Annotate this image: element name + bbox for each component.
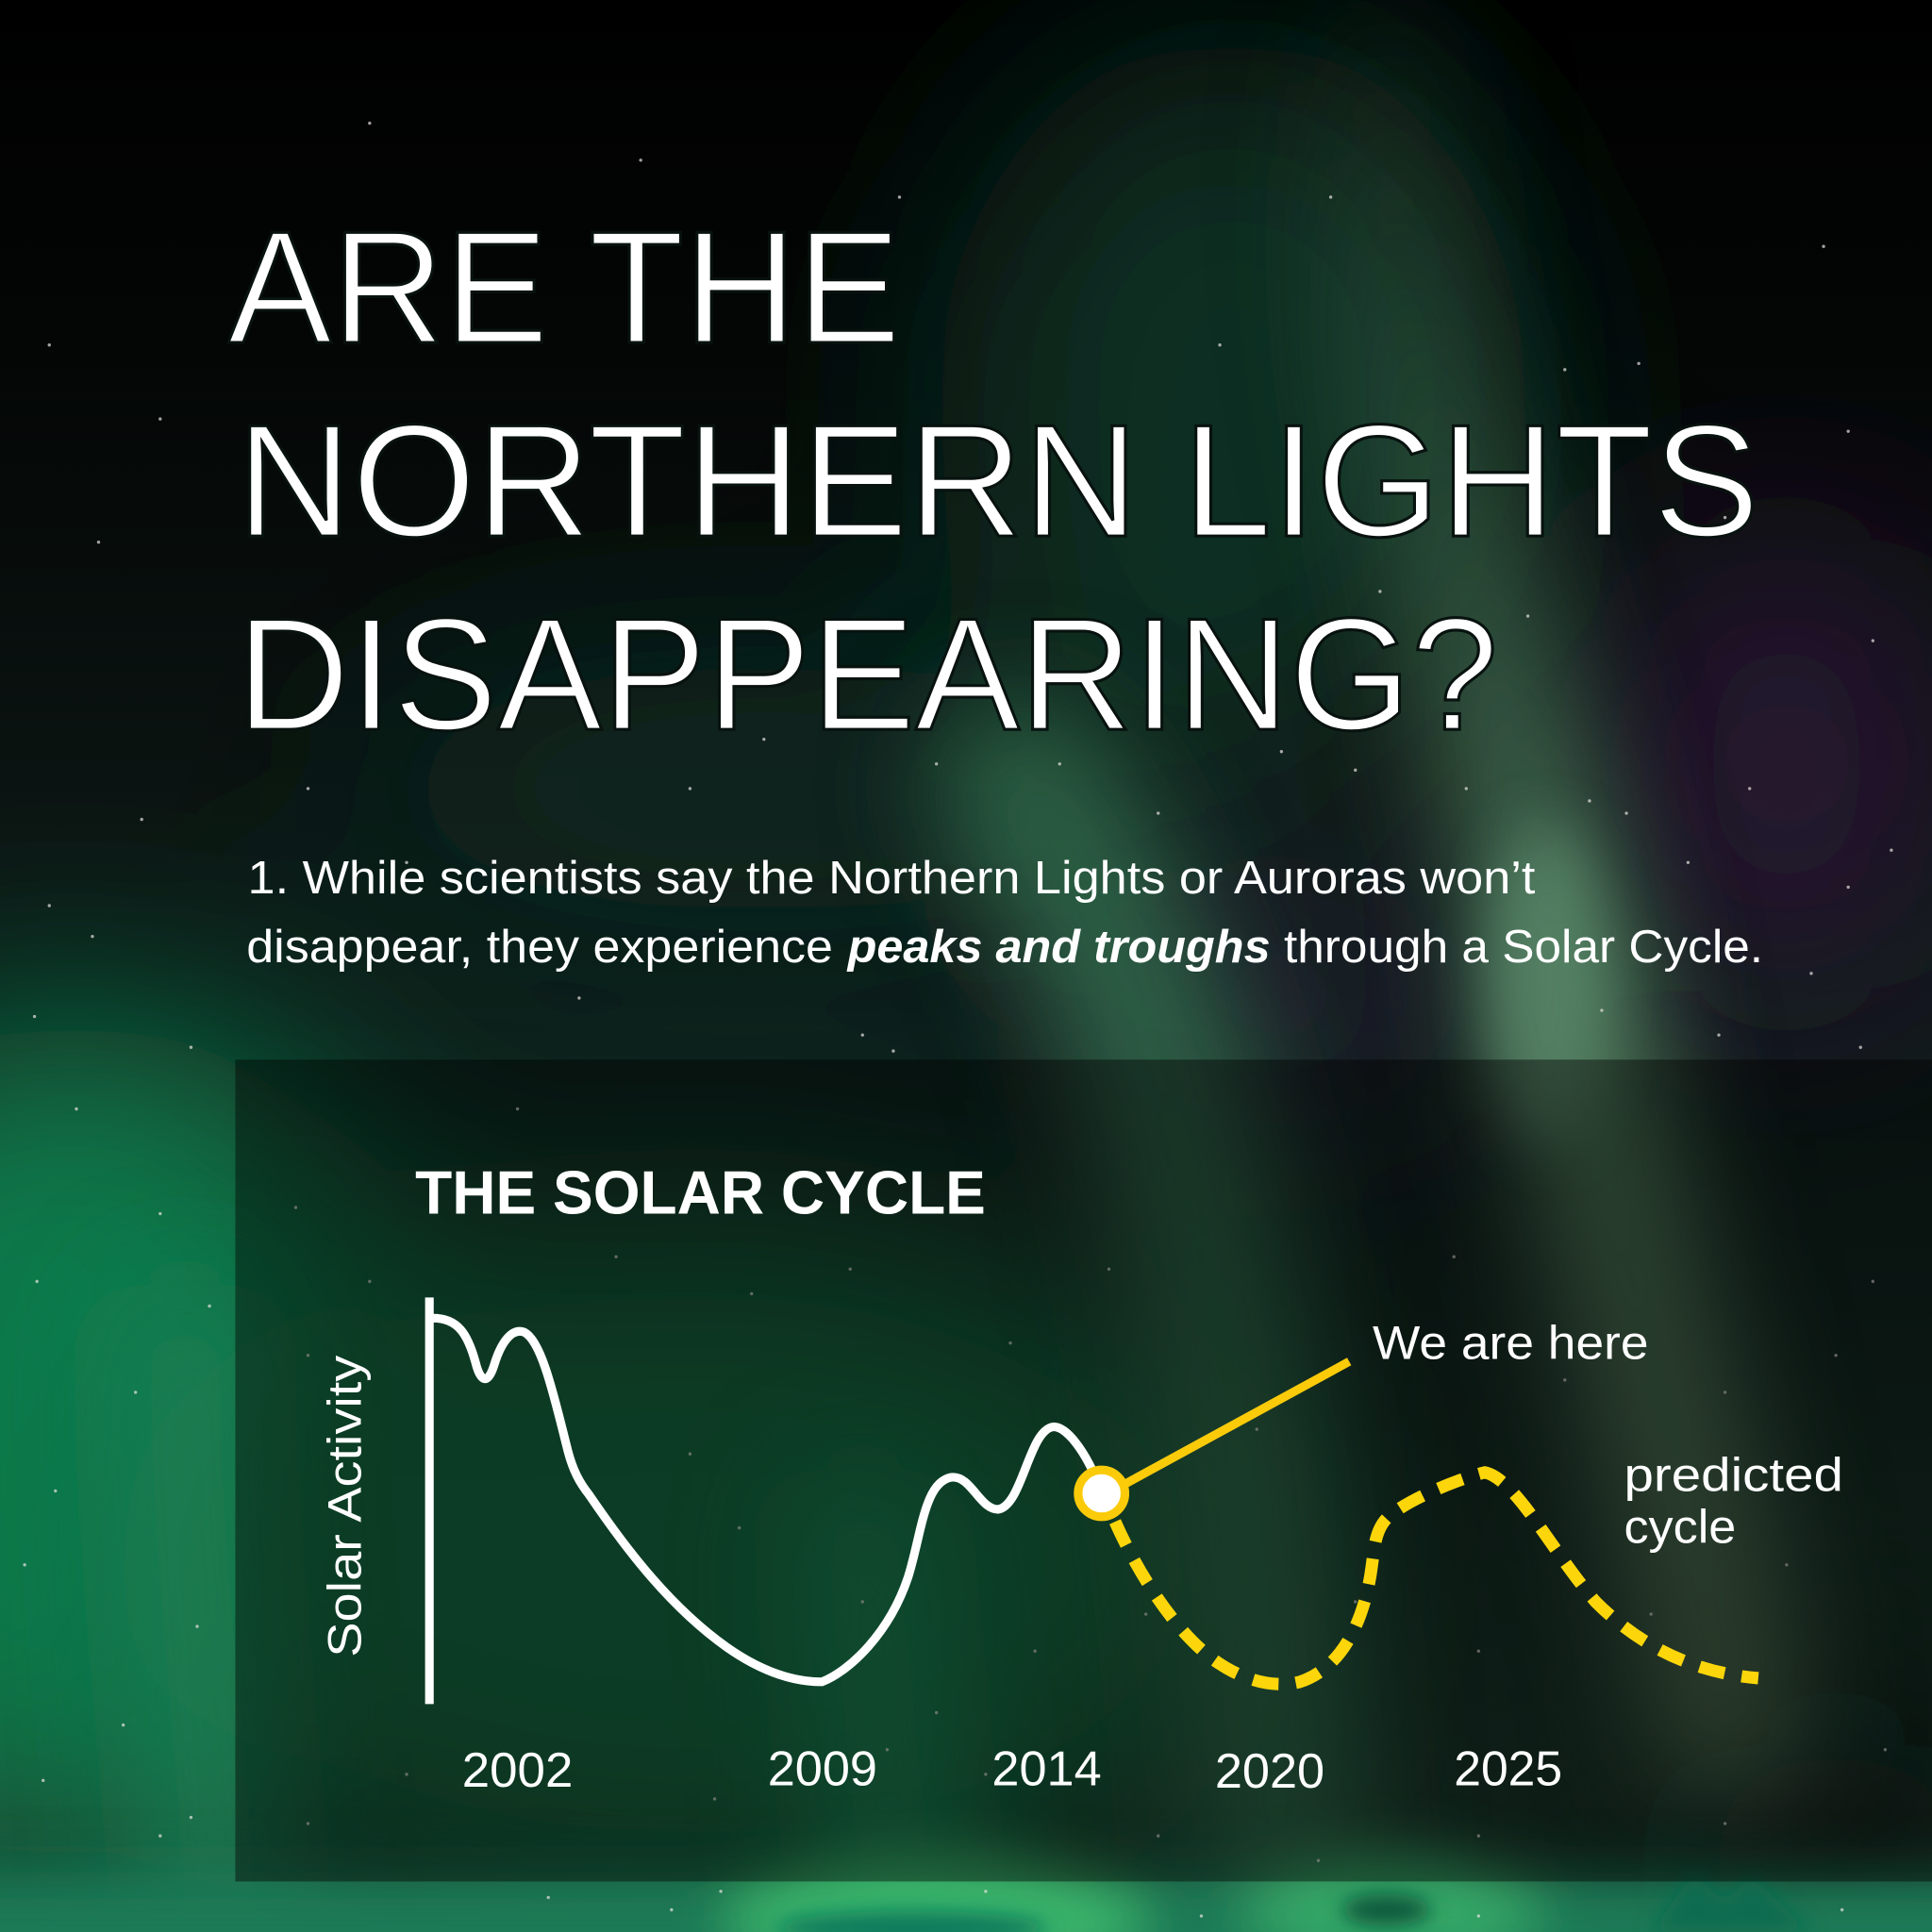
title [228, 197, 1759, 763]
we are here leader line [1124, 1361, 1349, 1485]
predicted cycle dashed curve [1115, 1473, 1758, 1684]
year labels: 2020 [1215, 1744, 1324, 1799]
title: NORTHERN LIGHTS [237, 391, 1759, 570]
chart heading: THE SOLAR CYCLE [415, 1158, 986, 1227]
intro text: 1. While scientists say the Northern Lights or Auroras won’t [248, 853, 1536, 904]
year labels [462, 1742, 1562, 1799]
year labels: 2025 [1454, 1742, 1562, 1797]
we are here marker [1078, 1470, 1124, 1517]
intro text: through a Solar Cycle. [1284, 922, 1763, 973]
intro text: peaks and troughs [846, 922, 1271, 973]
year labels: 2002 [462, 1743, 573, 1798]
year labels: 2014 [991, 1742, 1102, 1797]
intro text: disappear, they experience [246, 922, 833, 973]
panel: solar cycle chart [235, 1059, 1932, 1881]
title: DISAPPEARING? [237, 584, 1498, 763]
predicted cycle label: predicted [1624, 1448, 1843, 1501]
y-axis label: Solar Activity [319, 1356, 372, 1657]
y-axis line [426, 1297, 433, 1704]
solar activity curve [429, 1318, 1102, 1682]
panel background [235, 1059, 1932, 1881]
year labels: 2009 [768, 1742, 877, 1797]
title: ARE THE [228, 197, 901, 376]
intro text [246, 853, 1763, 973]
we are here label: We are here [1373, 1317, 1649, 1370]
predicted cycle label [1624, 1448, 1843, 1553]
predicted cycle label: cycle [1624, 1500, 1736, 1553]
